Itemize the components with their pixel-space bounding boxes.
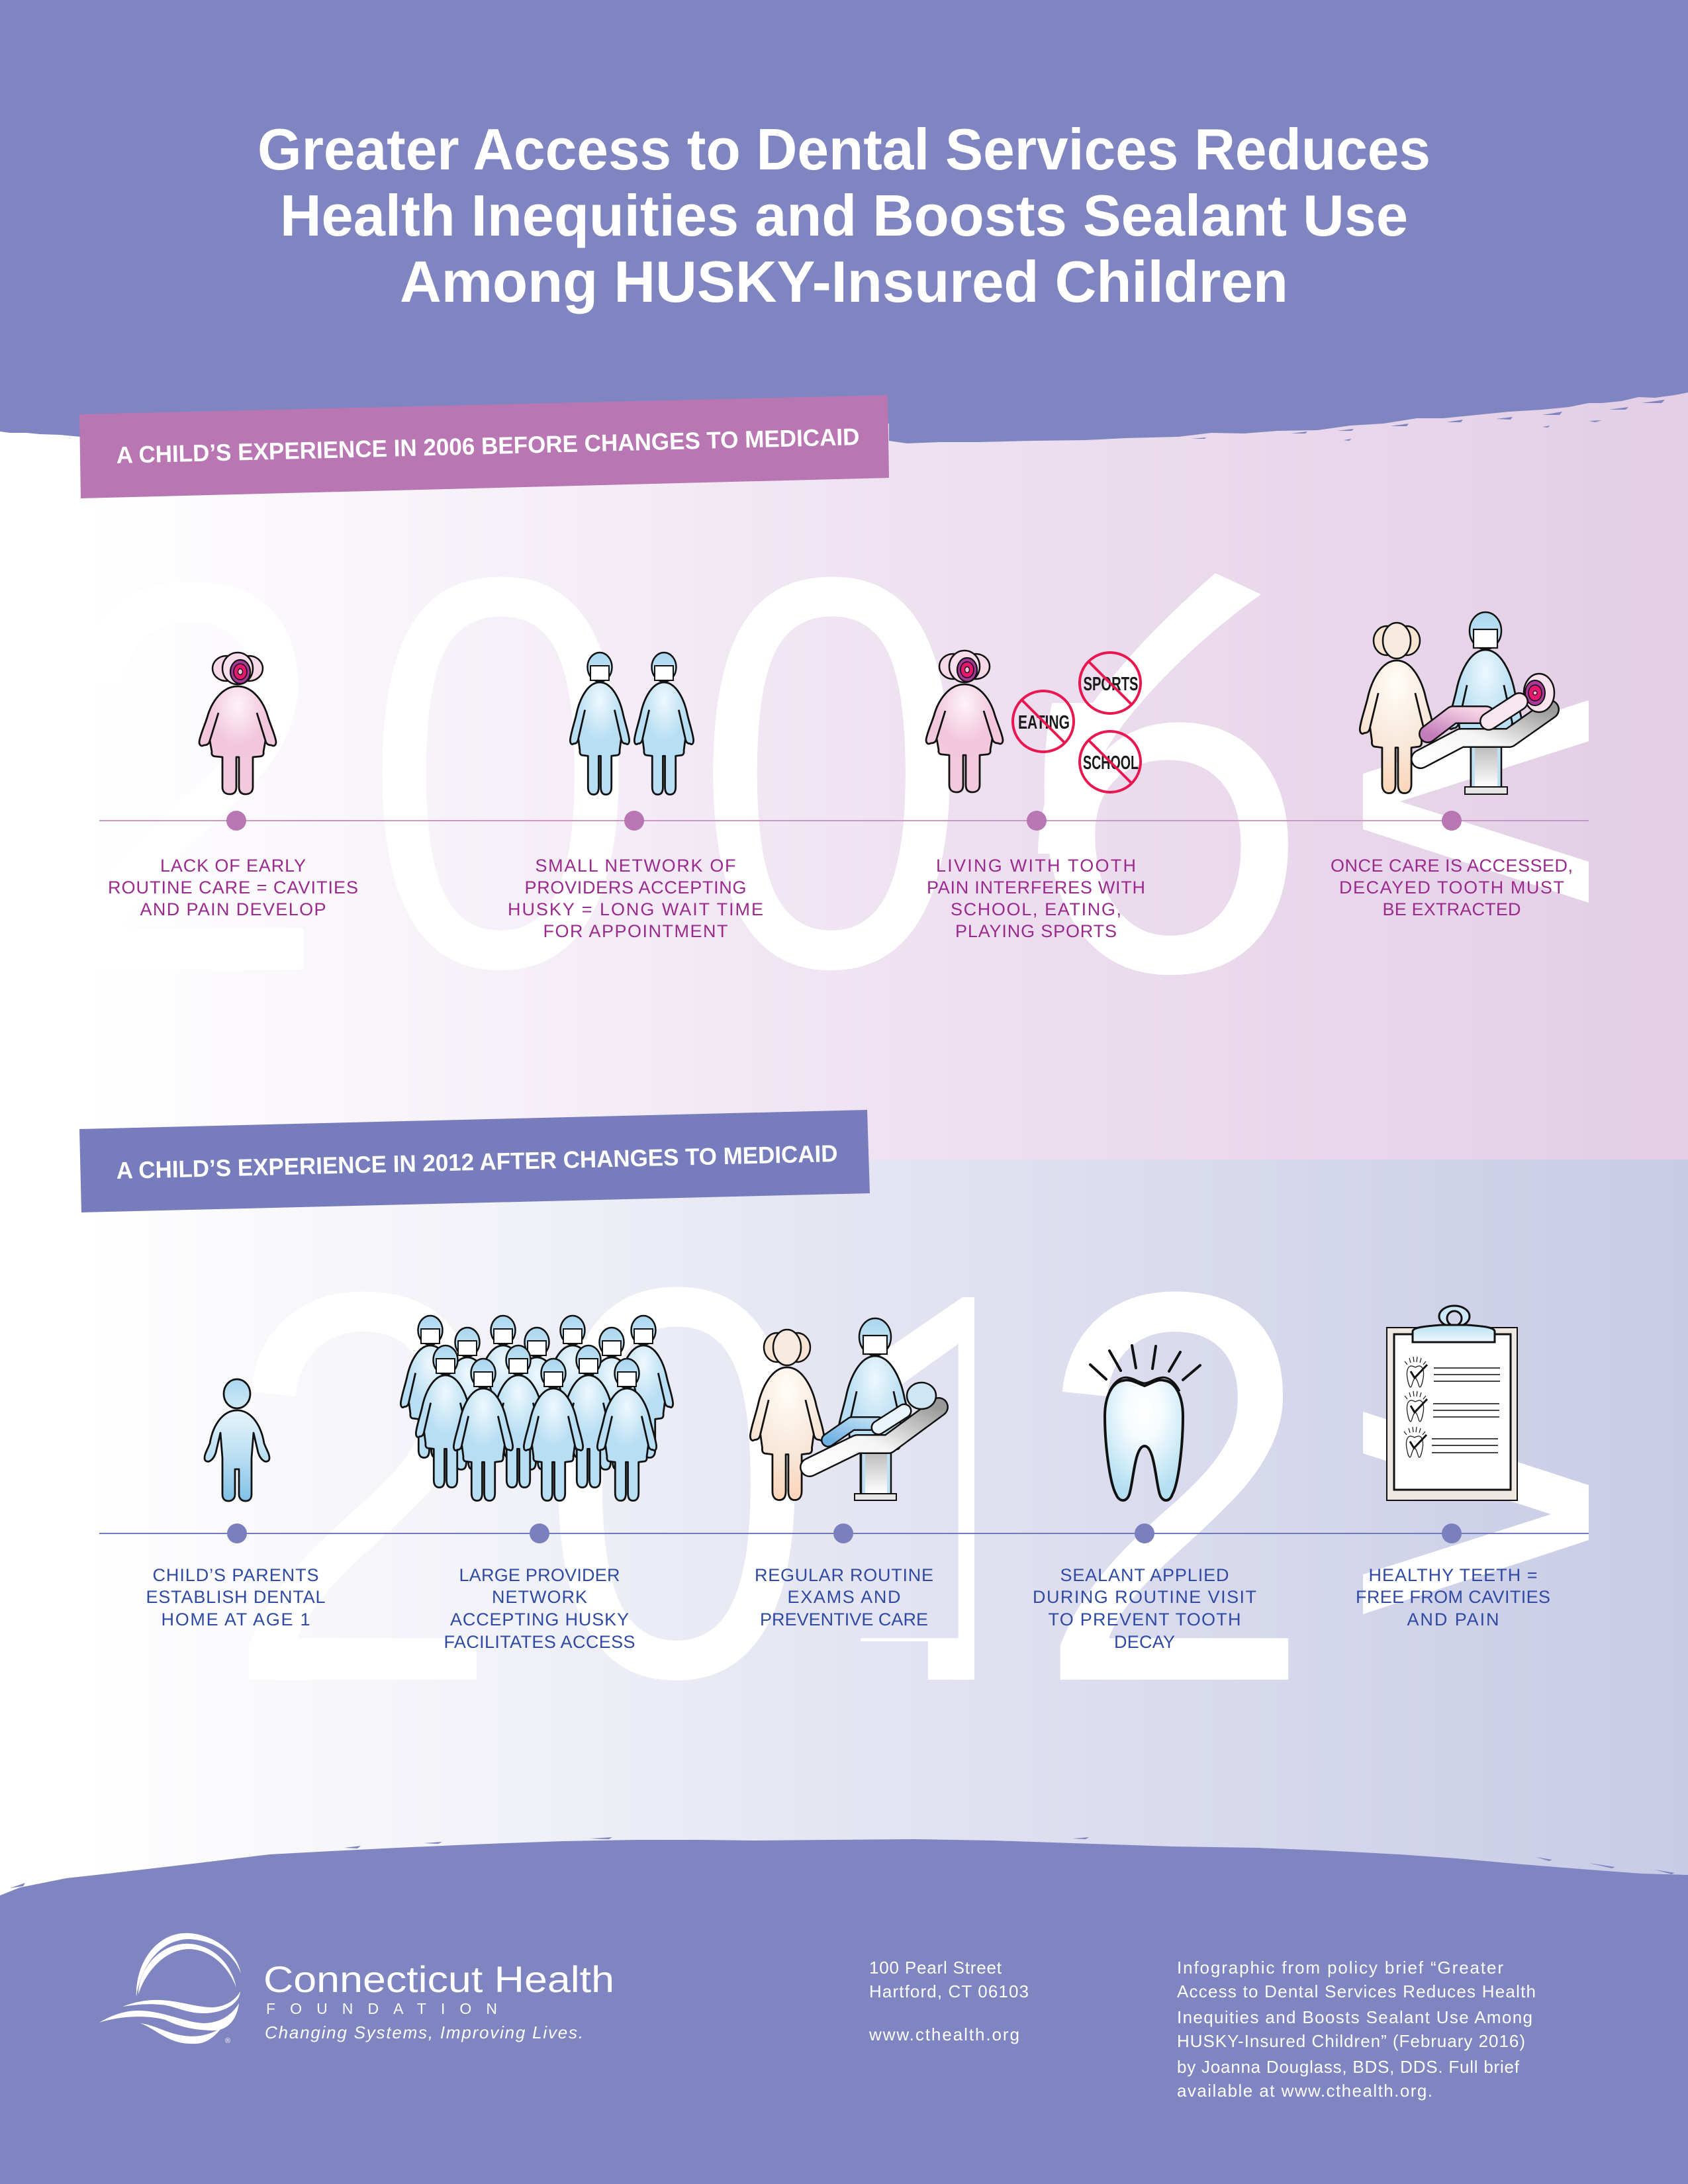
- caption: regular routine exams: [755, 1565, 933, 1629]
- icon: large crowd of dentists: [400, 1316, 673, 1501]
- watermark numerals: 2012: [326, 1287, 1288, 1681]
- icon: two dentists: [570, 653, 694, 795]
- timeline: 2012: [99, 1524, 1589, 1543]
- banner: 2006 heading: A CHILD’S EXPERIENCE IN 2006 BEFORE CHANGES TO MEDICAID: [116, 423, 860, 469]
- icon: no eating sign: EATING: [1018, 712, 1070, 733]
- icon: no school sign: [1080, 731, 1141, 792]
- caption: tooth must be extracted: DECAYED TOOTH MUST: [1339, 878, 1564, 897]
- watermark numerals: 2012: 0: [539, 1171, 814, 1794]
- caption: dental home at age 1: [146, 1565, 326, 1629]
- icon: tooth extraction scene: [1360, 612, 1554, 794]
- caption: small network of providers: SMALL NETWORK OF: [535, 856, 736, 876]
- icon: logo swoosh: [99, 1933, 241, 2044]
- caption: dental home at age 1: HOME AT AGE 1: [162, 1610, 310, 1629]
- watermark numerals: 2006: 0: [694, 461, 969, 1083]
- caption: sealant applied: DURING ROUTINE VISIT: [1033, 1587, 1256, 1607]
- watermark numerals: 2012: 1: [818, 1177, 1128, 1798]
- title: Health Inequities and Boosts Sealant Use: [280, 183, 1408, 248]
- icon: clipboard checklist: [1387, 1306, 1517, 1500]
- caption: healthy teeth: [1356, 1565, 1550, 1629]
- caption: living with tooth pain: SCHOOL, EATING,: [951, 899, 1121, 919]
- watermark numerals: 2006: 6: [1017, 466, 1311, 1087]
- caption: lack of early routine care: [108, 856, 358, 919]
- watermark numerals: 2012: 2: [224, 1177, 502, 1798]
- caption: small network of providers: [508, 856, 763, 941]
- caption: large provider network: ACCEPTING HUSKY: [450, 1610, 629, 1629]
- text block: source note: HUSKY-Insured Children” (February 2016): [1177, 2031, 1525, 2051]
- text block: source note: [1177, 1958, 1536, 2101]
- text block: address: Hartford, CT 06103: [869, 1981, 1029, 2001]
- logo: Connecticut Health Foundation: Changing Systems, Improving Lives.: [265, 2023, 583, 2042]
- caption: sealant applied: TO PREVENT TOOTH: [1049, 1610, 1241, 1629]
- caption: living with tooth pain: PAIN INTERFERES WITH: [927, 878, 1145, 897]
- watermark numerals: 2012: 2: [1035, 1177, 1313, 1798]
- title: Among HUSKY-Insured Children: [400, 249, 1288, 314]
- caption: tooth must be extracted: ONCE CARE IS ACCESSED,: [1331, 856, 1573, 876]
- footer band with torn edge: [0, 1837, 1688, 2184]
- icon: routine exam scene: [750, 1318, 939, 1500]
- caption: living with tooth pain: PLAYING SPORTS: [955, 921, 1117, 941]
- text block: source note: Access to Dental Services Reduces Health: [1177, 1981, 1536, 2001]
- caption: large provider network: NETWORK: [492, 1587, 587, 1607]
- watermark numerals: 2006: 0: [363, 461, 638, 1083]
- header band with torn edge: [0, 0, 1688, 443]
- caption: small network of providers: FOR APPOINTMENT: [543, 921, 728, 941]
- caption: regular routine exams: REGULAR ROUTINE: [755, 1565, 933, 1585]
- caption: dental home at age 1: ESTABLISH DENTAL: [146, 1587, 326, 1607]
- caption: sealant applied: [1033, 1565, 1256, 1652]
- text block: source note: Infographic from policy brief “Greater: [1177, 1958, 1503, 1978]
- watermark chevron: 2006: [1363, 700, 1589, 903]
- timeline: 2006: [99, 811, 1589, 831]
- text block: address: [868, 1958, 1029, 2044]
- panel: 2006 section background: [0, 384, 1688, 1160]
- icon: child with tooth pain: [199, 653, 276, 794]
- caption: small network of providers: HUSKY = LONG WAIT TIME: [508, 899, 763, 919]
- title: [258, 116, 1430, 314]
- caption: healthy teeth: AND PAIN: [1407, 1610, 1499, 1629]
- icon: sealed tooth with rays: [1090, 1345, 1200, 1500]
- caption: healthy teeth: FREE FROM CAVITIES: [1356, 1587, 1550, 1607]
- caption: large provider network: FACILITATES ACCESS: [444, 1632, 635, 1652]
- banner: 2012 heading: [79, 1110, 870, 1212]
- caption: small network of providers: PROVIDERS ACCEPTING: [524, 878, 747, 897]
- caption: lack of early routine care: LACK OF EARLY: [160, 856, 306, 876]
- icon: no eating sign: [1013, 691, 1074, 752]
- watermark chevron: 2012: [1363, 1412, 1589, 1614]
- caption: large provider network: [444, 1565, 635, 1652]
- logo: Connecticut Health Foundation: FOUNDATION: [266, 2000, 497, 2017]
- caption: tooth must be extracted: [1331, 856, 1573, 919]
- icon: no sports sign: SPORTS: [1083, 674, 1139, 695]
- logo: Connecticut Health Foundation: [99, 1933, 614, 2045]
- caption: sealant applied: DECAY: [1114, 1632, 1175, 1652]
- icon: child with tooth pain and missed activities: [926, 651, 1141, 792]
- logo: Connecticut Health Foundation: Connecticut Health: [263, 1958, 614, 2000]
- text block: address: www.cthealth.org: [868, 2025, 1019, 2044]
- text block: source note: Inequities and Boosts Sealant Use Among: [1177, 2007, 1532, 2027]
- caption: regular routine exams: PREVENTIVE CARE: [760, 1610, 928, 1629]
- caption: lack of early routine care: ROUTINE CARE = CAVITIES: [108, 878, 358, 897]
- banner: 2012 heading: A CHILD’S EXPERIENCE IN 2012 AFTER CHANGES TO MEDICAID: [116, 1140, 838, 1184]
- caption: tooth must be extracted: BE EXTRACTED: [1382, 899, 1521, 919]
- icon: child: [205, 1379, 269, 1501]
- watermark numerals: 2006: 2: [50, 467, 328, 1088]
- caption: living with tooth pain: [927, 856, 1145, 941]
- caption: healthy teeth: HEALTHY TEETH =: [1369, 1565, 1537, 1585]
- icon: no school sign: SCHOOL: [1083, 752, 1139, 774]
- caption: regular routine exams: EXAMS AND: [788, 1587, 900, 1607]
- panel: 2012 section background: [0, 1160, 1688, 1901]
- caption: living with tooth pain: LIVING WITH TOOTH: [936, 856, 1136, 876]
- icon: no sports sign: [1080, 653, 1141, 713]
- title: Greater Access to Dental Services Reduces: [258, 116, 1430, 182]
- logo: Connecticut Health Foundation: ®: [225, 2037, 230, 2045]
- text block: address: 100 Pearl Street: [869, 1958, 1002, 1978]
- banner: 2006 heading: [79, 395, 889, 498]
- caption: sealant applied: SEALANT APPLIED: [1060, 1565, 1229, 1585]
- caption: lack of early routine care: AND PAIN DEVELOP: [140, 899, 326, 919]
- watermark numerals: 2006: [383, 573, 1288, 976]
- text block: source note: by Joanna Douglass, BDS, DDS. Full brief: [1177, 2057, 1520, 2077]
- caption: dental home at age 1: CHILD’S PARENTS: [152, 1565, 319, 1585]
- text block: source note: available at www.cthealth.org.: [1177, 2081, 1432, 2101]
- caption: large provider network: LARGE PROVIDER: [459, 1565, 620, 1585]
